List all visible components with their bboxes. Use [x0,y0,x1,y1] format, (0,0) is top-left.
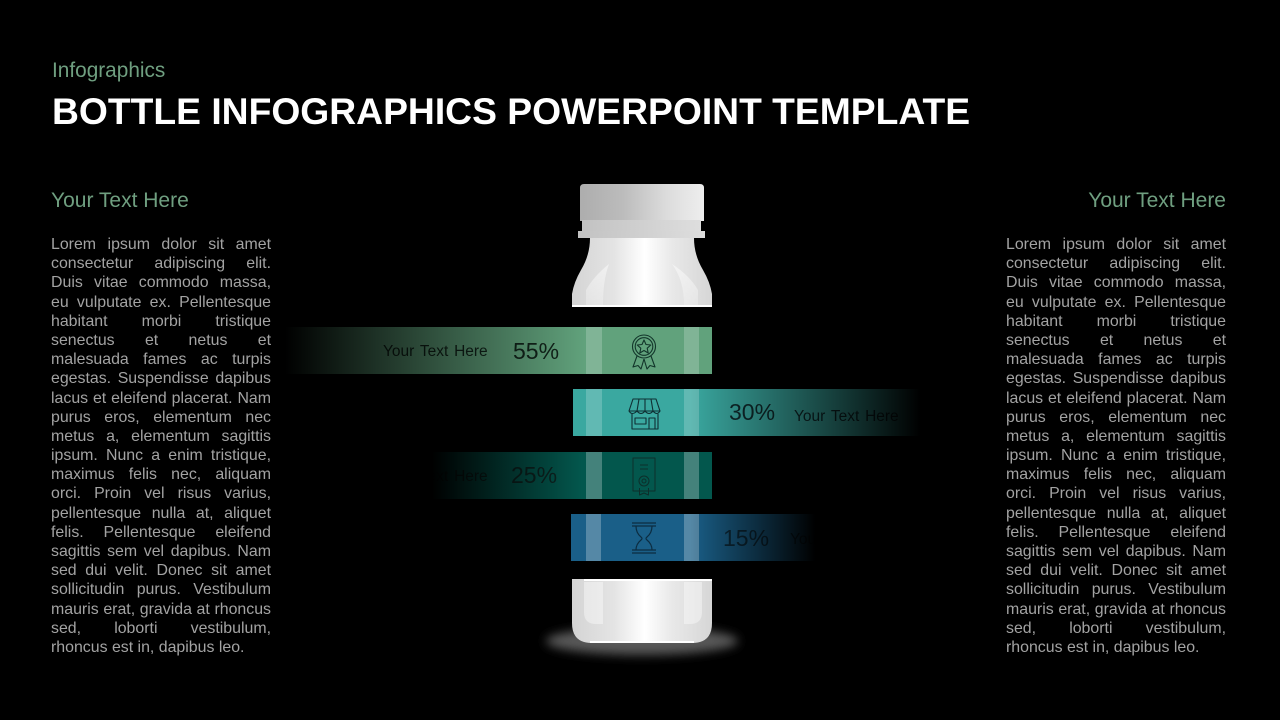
bar: 25% [280,452,712,499]
bottle cap [580,184,704,221]
right text block: sollicitudin purus. Vestibulum [1006,581,1226,598]
title: BOTTLE INFOGRAPHICS POWERPOINT TEMPLATE [52,90,970,132]
right text block: maximus felis nec, aliquam [1006,466,1226,483]
left text block: sagittis sem vel dapibus. Nam [51,543,271,560]
right text block: purus eros, elementum nec [1006,409,1226,426]
right text block: sagittis sem vel dapibus. Nam [1006,543,1226,560]
right text block: rhoncus est in, dapibus leo. [1006,639,1199,656]
right text block [1006,236,1226,656]
icon: certificate [633,458,655,495]
left text block: egestas. Suspendisse dapibus [51,370,271,387]
right text block: eu vulputate ex. Pellentesque [1006,294,1226,311]
left text block: sed, loborti vestibulum, [51,620,271,637]
right text block: Duis vitae commodo massa, [1006,274,1226,291]
right text block: habitant morbi tristique [1006,313,1226,330]
label: Your Text Here [383,468,488,485]
right text block: sed dui velit. Donec sit amet [1006,562,1226,579]
right text block: malesuada fames ac turpis [1006,351,1226,368]
right text block: lacus et eleifend placerat. Nam [1006,390,1226,406]
bar: 15% [571,514,935,561]
right text block: ipsum. Nunc a enim tristique, [1006,447,1226,464]
right text block: egestas. Suspendisse dapibus [1006,370,1226,387]
bottle top [572,184,712,307]
right text block: mauris erat, gravida at rhoncus [1006,601,1226,618]
left text block: eu vulputate ex. Pellentesque [51,294,271,311]
label: Your Text Here [794,408,899,425]
icon: hourglass [632,523,656,553]
bottle neck and shoulders [572,238,712,307]
left text block: lacus et eleifend placerat. Nam [51,390,271,406]
percent: 15% [723,525,769,551]
left text block: sollicitudin purus. Vestibulum [51,581,271,598]
left text block [51,236,271,656]
percent: 55% [513,338,559,364]
left text block: consectetur adipiscing elit. [51,255,271,272]
left text block: habitant morbi tristique [51,313,271,330]
label: Your Text Here [383,343,488,360]
left text block: orci. Proin vel risus varius, [51,485,271,502]
left text block: pellentesque nulla at, aliquet [51,505,271,522]
left text block: purus eros, elementum nec [51,409,271,426]
right text block: felis. Pellentesque eleifend [1006,524,1226,541]
bottle shadow [546,627,738,655]
right heading: Your Text Here [1088,189,1226,212]
left text block: mauris erat, gravida at rhoncus [51,601,271,618]
right text block: senectus et netus et [1006,332,1226,349]
left text block: metus a, elementum sagittis [51,428,271,445]
percent: 30% [729,399,775,425]
right text block: sed, loborti vestibulum, [1006,620,1226,637]
label: Your Text Here [790,531,895,548]
left text block: senectus et netus et [51,332,271,349]
left text block: felis. Pellentesque eleifend [51,524,271,541]
bar: 30% [573,389,920,436]
right text block: metus a, elementum sagittis [1006,428,1226,445]
icon: store [629,399,660,429]
right text block: consectetur adipiscing elit. [1006,255,1226,272]
icon: award rosette [632,335,656,369]
bar: 55% [285,327,712,374]
left text block: Lorem ipsum dolor sit amet [51,236,271,253]
left text block: malesuada fames ac turpis [51,351,271,368]
left text block: maximus felis nec, aliquam [51,466,271,483]
left heading: Your Text Here [51,189,189,212]
right text block: orci. Proin vel risus varius, [1006,485,1226,502]
subtitle: Infographics [52,59,165,82]
left text block: sed dui velit. Donec sit amet [51,562,271,579]
bottle base [572,579,712,643]
left text block: rhoncus est in, dapibus leo. [51,639,244,656]
right text block: Lorem ipsum dolor sit amet [1006,236,1226,253]
percent: 25% [511,462,557,488]
right text block: pellentesque nulla at, aliquet [1006,505,1226,522]
left text block: ipsum. Nunc a enim tristique, [51,447,271,464]
left text block: Duis vitae commodo massa, [51,274,271,291]
